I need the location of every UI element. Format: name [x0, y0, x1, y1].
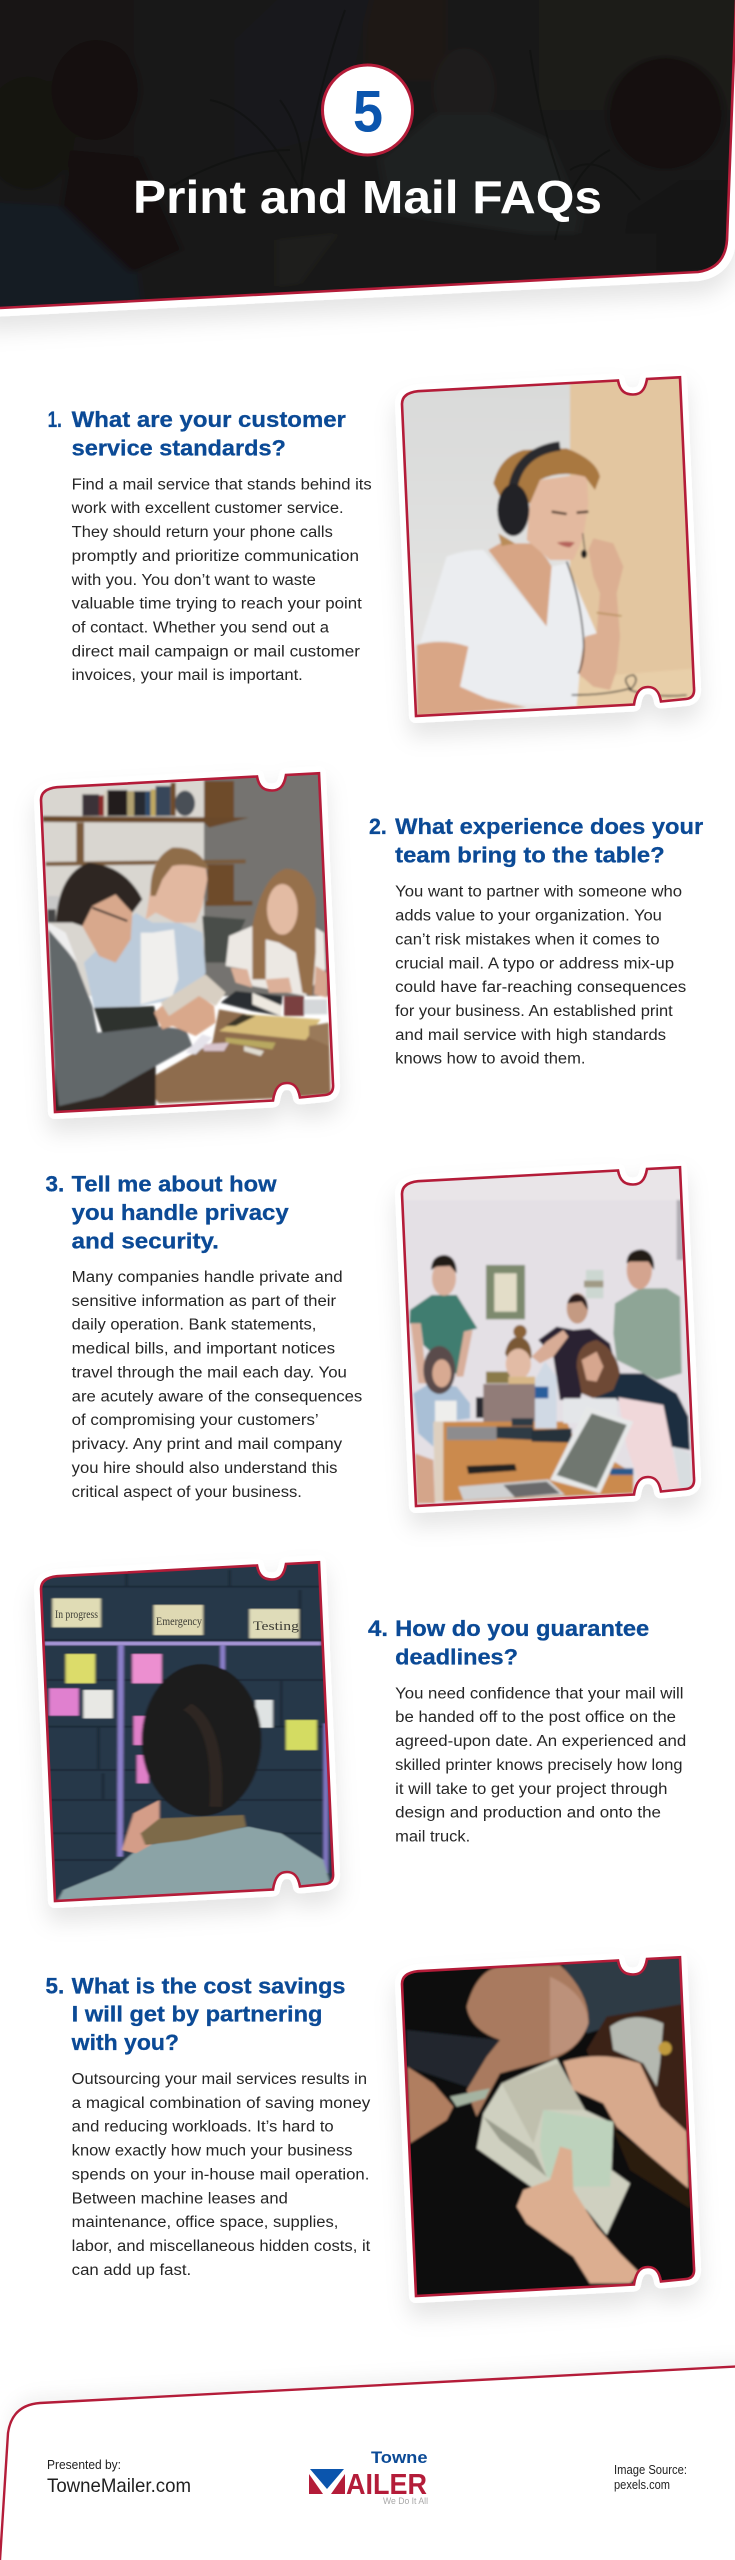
image source: [614, 2463, 687, 2492]
heading: question 3: you handle privacy: [72, 1200, 290, 1225]
body text: question 1: work with excellent customer service.: [71, 500, 344, 517]
logo: Towne Mailer: [309, 2448, 428, 2506]
heading: question 5: I will get by partnering: [72, 2002, 322, 2027]
photo card 3: group around laptops: [397, 1157, 703, 1513]
heading: question 3: [46, 1172, 290, 1253]
photo card 1: woman with headset: [397, 367, 703, 723]
photo card 5: hands counting money: [397, 1947, 703, 2303]
heading: question 3: 3.: [46, 1172, 64, 1197]
body text: question 3: are acutely aware of the consequences: [72, 1388, 363, 1405]
body text: question 4: skilled printer knows precisely how long: [395, 1757, 682, 1774]
title: Print and Mail FAQs: [133, 171, 602, 223]
body text: question 3: privacy. Any print and mail company: [72, 1436, 343, 1453]
sticky note labels: [55, 1607, 300, 1633]
body text: question 2: [395, 884, 687, 1068]
body text: question 3: Many companies handle private and: [72, 1269, 343, 1286]
number badge: 5: [353, 80, 383, 144]
heading: question 2: [369, 814, 704, 868]
body text: question 3: of compromising your customers’: [72, 1412, 319, 1429]
body text: question 4: it will take to get your project through: [395, 1781, 668, 1798]
heading: question 2: What experience does your: [395, 814, 704, 839]
heading: question 3: Tell me about how: [72, 1172, 277, 1197]
sticky note labels: Emergency: [156, 1614, 202, 1628]
panel: question 5 text: [46, 1973, 371, 2279]
body text: question 2: You want to partner with someone who: [395, 884, 682, 901]
panel: question 2 text: [369, 814, 704, 1068]
body text: question 2: knows how to avoid them.: [395, 1051, 586, 1068]
body text: question 4: agreed-upon date. An experienced and: [395, 1733, 686, 1750]
photo card 4: person at kanban wall: [33, 1557, 338, 1910]
body text: question 5: Between machine leases and: [72, 2190, 288, 2207]
body text: question 3: [72, 1269, 363, 1501]
heading: question 4: [368, 1616, 649, 1669]
body text: question 5: a magical combination of saving money: [72, 2095, 371, 2112]
body text: question 5: labor, and miscellaneous hidden costs, it: [72, 2238, 371, 2255]
header background photo (dark meeting): [0, 0, 735, 307]
body text: question 5: Outsourcing your mail services results in: [72, 2071, 367, 2088]
body text: question 3: daily operation. Bank statements,: [72, 1317, 316, 1334]
body text: question 2: can’t risk mistakes when it comes to: [395, 931, 660, 948]
heading: question 5: [46, 1973, 346, 2055]
body text: question 1: of contact. Whether you send out a: [72, 620, 329, 636]
heading: question 4: deadlines?: [395, 1644, 518, 1669]
body text: question 1: promptly and prioritize communication: [72, 548, 359, 565]
body text: question 5: can add up fast.: [72, 2262, 191, 2279]
footer panel: [0, 2366, 735, 2560]
body text: question 1: [71, 476, 372, 684]
heading: question 3: and security.: [72, 1228, 219, 1253]
logo: Towne Mailer: Towne: [371, 2448, 428, 2467]
body text: question 4: [395, 1685, 686, 1846]
presented by: TowneMailer.com: [47, 2475, 191, 2497]
body text: question 5: maintenance, office space, supplies,: [72, 2214, 338, 2231]
logo: Towne Mailer: We Do It All: [383, 2496, 428, 2506]
body text: question 4: design and production and onto the: [395, 1805, 661, 1822]
body text: question 5: spends on your in-house mail operation.: [72, 2166, 369, 2184]
body text: question 1: They should return your phone calls: [72, 524, 333, 541]
photo card 2: team at table: [36, 763, 337, 1113]
heading: question 5: What is the cost savings: [72, 1973, 345, 1998]
body text: question 5: and reducing workloads. It’s hard to: [72, 2119, 334, 2136]
body text: question 3: critical aspect of your business.: [72, 1484, 302, 1501]
body text: question 2: could have far-reaching consequences: [395, 979, 687, 996]
body text: question 3: sensitive information as part of their: [72, 1293, 336, 1310]
body text: question 1: valuable time trying to reach your point: [72, 596, 363, 613]
body text: question 2: adds value to your organization. You: [395, 908, 662, 924]
heading: question 4: 4.: [368, 1616, 388, 1641]
body text: question 4: be handed off to the post office on the: [395, 1709, 676, 1726]
body text: question 1: invoices, your mail is important.: [72, 667, 303, 684]
body text: question 3: travel through the mail each day. You: [72, 1364, 347, 1382]
panel: question 1 text: [48, 407, 372, 684]
heading: question 1: 1.: [48, 407, 62, 432]
presented by: Presented by:: [47, 2457, 121, 2472]
body text: question 1: direct mail campaign or mail customer: [72, 643, 360, 660]
number badge: [322, 65, 412, 155]
panel: question 4 text: [368, 1616, 686, 1846]
body text: question 4: You need confidence that your mail will: [395, 1685, 684, 1702]
body text: question 5: [72, 2071, 371, 2279]
heading: question 2: 2.: [369, 814, 387, 839]
body text: question 1: with you. You don’t want to waste: [71, 572, 316, 589]
body text: question 2: and mail service with high standards: [395, 1027, 666, 1044]
sticky note labels: In progress: [55, 1607, 98, 1621]
heading: question 1: [48, 407, 346, 461]
header banner: [0, 0, 735, 367]
body text: question 1: Find a mail service that stands behind its: [72, 476, 372, 493]
heading: question 5: with you?: [71, 2030, 179, 2055]
image source: Image Source:: [614, 2463, 687, 2477]
heading: question 5: 5.: [46, 1973, 64, 1998]
heading: question 1: What are your customer: [72, 407, 346, 432]
heading: question 1: service standards?: [72, 436, 286, 461]
panel: question 3 text: [46, 1172, 363, 1501]
body text: question 5: know exactly how much your business: [72, 2143, 353, 2160]
body text: question 2: for your business. An established print: [395, 1003, 673, 1020]
body text: question 2: crucial mail. A typo or address mix-up: [395, 955, 674, 972]
heading: question 4: How do you guarantee: [395, 1616, 649, 1641]
logo: Towne Mailer: AILER: [346, 2469, 427, 2501]
body text: question 3: medical bills, and important notices: [72, 1341, 335, 1358]
body text: question 4: mail truck.: [395, 1828, 470, 1846]
sticky note labels: Testing: [253, 1618, 300, 1633]
body text: question 3: you hire should also understand this: [72, 1460, 338, 1477]
image source: pexels.com: [614, 2478, 670, 2492]
heading: question 2: team bring to the table?: [395, 843, 665, 868]
presented by: [47, 2457, 191, 2497]
